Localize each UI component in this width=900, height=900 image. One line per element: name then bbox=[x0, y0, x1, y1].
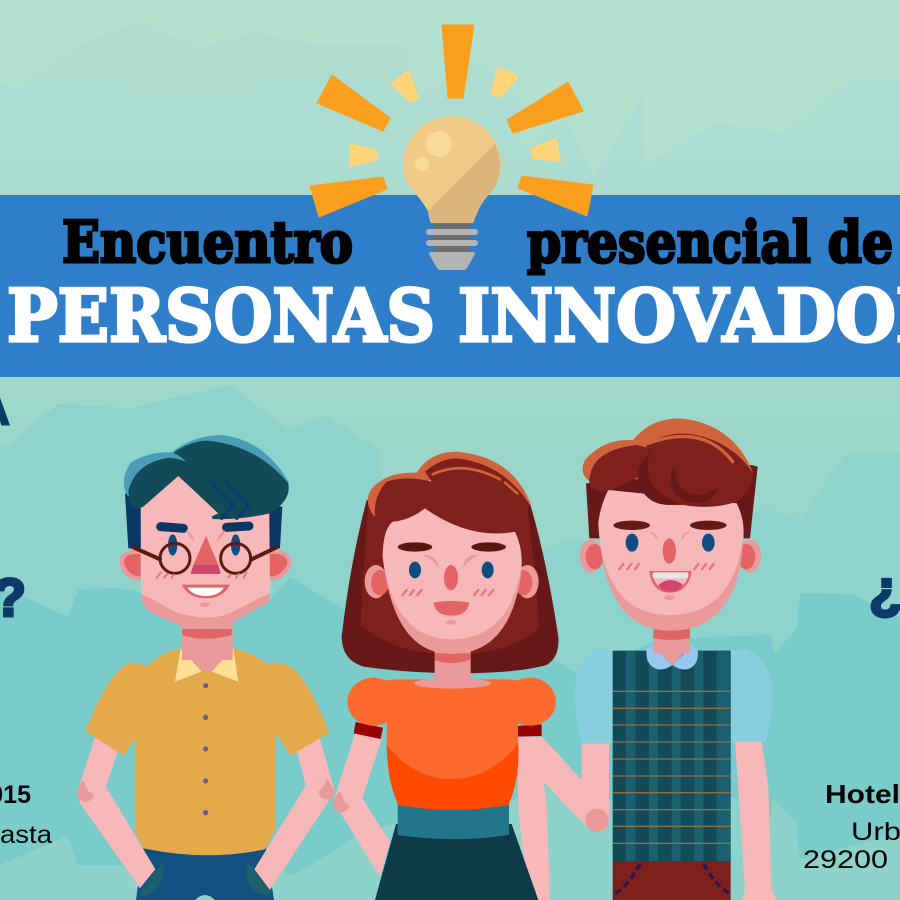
hand bbox=[585, 809, 609, 832]
body bbox=[560, 640, 777, 900]
left elbow bbox=[333, 792, 349, 812]
left hair lump bbox=[589, 445, 650, 492]
blouse lower bbox=[387, 743, 519, 810]
postal code: 29200 bbox=[803, 846, 888, 874]
trousers bbox=[136, 847, 274, 900]
collar bbox=[175, 648, 238, 682]
hair top edge bbox=[583, 418, 753, 482]
trousers bbox=[613, 860, 731, 900]
elbows bbox=[77, 781, 93, 802]
banner background bbox=[0, 195, 900, 377]
belt bbox=[398, 803, 509, 839]
eyebrows bbox=[161, 526, 249, 528]
time: asta bbox=[0, 821, 52, 849]
right arm bbox=[517, 737, 570, 900]
head bbox=[119, 435, 292, 660]
eyebrows bbox=[398, 542, 432, 552]
body bbox=[333, 678, 570, 900]
rays bbox=[310, 25, 593, 217]
ears bbox=[119, 550, 141, 581]
nose bbox=[663, 538, 676, 564]
blouse upper bbox=[387, 679, 518, 779]
left puff sleeve bbox=[347, 678, 399, 726]
side text: right column bbox=[803, 560, 900, 874]
bulb highlights bbox=[426, 131, 452, 157]
pockets bbox=[138, 864, 164, 896]
hair highlight bbox=[648, 436, 733, 462]
bulb base bbox=[426, 229, 478, 235]
character: woman bbox=[333, 452, 570, 900]
glasses bbox=[133, 543, 277, 573]
hair highlight bbox=[124, 435, 289, 497]
bulb shade bbox=[428, 144, 500, 223]
face shadow bbox=[598, 490, 744, 631]
right puff sleeve bbox=[504, 678, 556, 726]
eyes bbox=[168, 534, 177, 556]
chin bbox=[199, 602, 210, 607]
hair tongue bbox=[160, 452, 186, 462]
freckles bbox=[157, 573, 247, 578]
head bbox=[580, 418, 761, 653]
venue: Hotel bbox=[825, 779, 900, 809]
shirt bbox=[86, 648, 329, 855]
face shadow bbox=[383, 508, 522, 654]
mouth bbox=[433, 601, 469, 616]
face bbox=[383, 508, 522, 639]
curl shadow bbox=[638, 452, 717, 505]
back hair bbox=[125, 493, 282, 548]
freckles bbox=[403, 590, 493, 595]
side text: left column bbox=[0, 391, 52, 849]
main curl bbox=[640, 434, 753, 507]
icon: light bulb with rays bbox=[310, 25, 593, 270]
vest lines bbox=[613, 691, 731, 843]
mouth bbox=[182, 585, 230, 598]
brow shading bbox=[422, 555, 479, 568]
arms bbox=[77, 737, 155, 888]
face bbox=[141, 475, 270, 618]
skirt bbox=[375, 824, 538, 900]
neckline bbox=[414, 678, 491, 689]
mouth bbox=[649, 571, 692, 593]
character: man with vest bbox=[560, 418, 777, 900]
right arm bbox=[735, 740, 777, 900]
brow shading bbox=[648, 532, 690, 541]
title banner bbox=[0, 195, 900, 377]
eyebrows bbox=[613, 521, 650, 530]
ears bbox=[365, 565, 387, 598]
face bbox=[598, 490, 744, 615]
bulb glass bbox=[403, 116, 501, 223]
body bbox=[77, 640, 335, 900]
hair bbox=[128, 441, 289, 519]
heading line 1 left: Encuentro bbox=[62, 209, 353, 276]
nose bbox=[193, 536, 218, 565]
hair highlights bbox=[433, 468, 517, 493]
character: man with glasses bbox=[77, 435, 335, 900]
ears bbox=[580, 539, 601, 573]
head bbox=[342, 452, 558, 688]
hair top edge bbox=[368, 452, 531, 517]
back hair bbox=[586, 465, 758, 538]
neck upper bbox=[182, 617, 233, 660]
neck bbox=[181, 640, 233, 672]
sleeves bbox=[575, 650, 613, 743]
stitching bbox=[615, 864, 729, 894]
vest bbox=[613, 651, 731, 861]
buttons bbox=[203, 683, 208, 815]
cuffs bbox=[354, 722, 542, 739]
bulb screw bbox=[434, 224, 470, 252]
heading line 2 left: PERSONAS bbox=[7, 273, 435, 358]
neck bbox=[653, 640, 690, 665]
freckles bbox=[619, 564, 714, 569]
eyes bbox=[409, 562, 421, 578]
chin bbox=[446, 620, 456, 625]
left arm bbox=[333, 733, 390, 877]
forearm of woman and man's arm bbox=[560, 743, 609, 832]
nose bbox=[444, 565, 458, 590]
back hair bbox=[342, 500, 558, 673]
eyes bbox=[626, 534, 638, 552]
face shadow bbox=[141, 587, 270, 628]
small rays bbox=[349, 66, 561, 167]
neck bbox=[435, 647, 471, 688]
chin bbox=[664, 595, 675, 600]
vest stripes bbox=[626, 651, 731, 861]
hair fringe bbox=[375, 458, 530, 533]
brow shading bbox=[186, 530, 225, 542]
address line: Urb bbox=[851, 818, 900, 846]
neck bbox=[653, 623, 690, 653]
collar bbox=[646, 645, 698, 669]
hair strands bbox=[212, 483, 248, 518]
